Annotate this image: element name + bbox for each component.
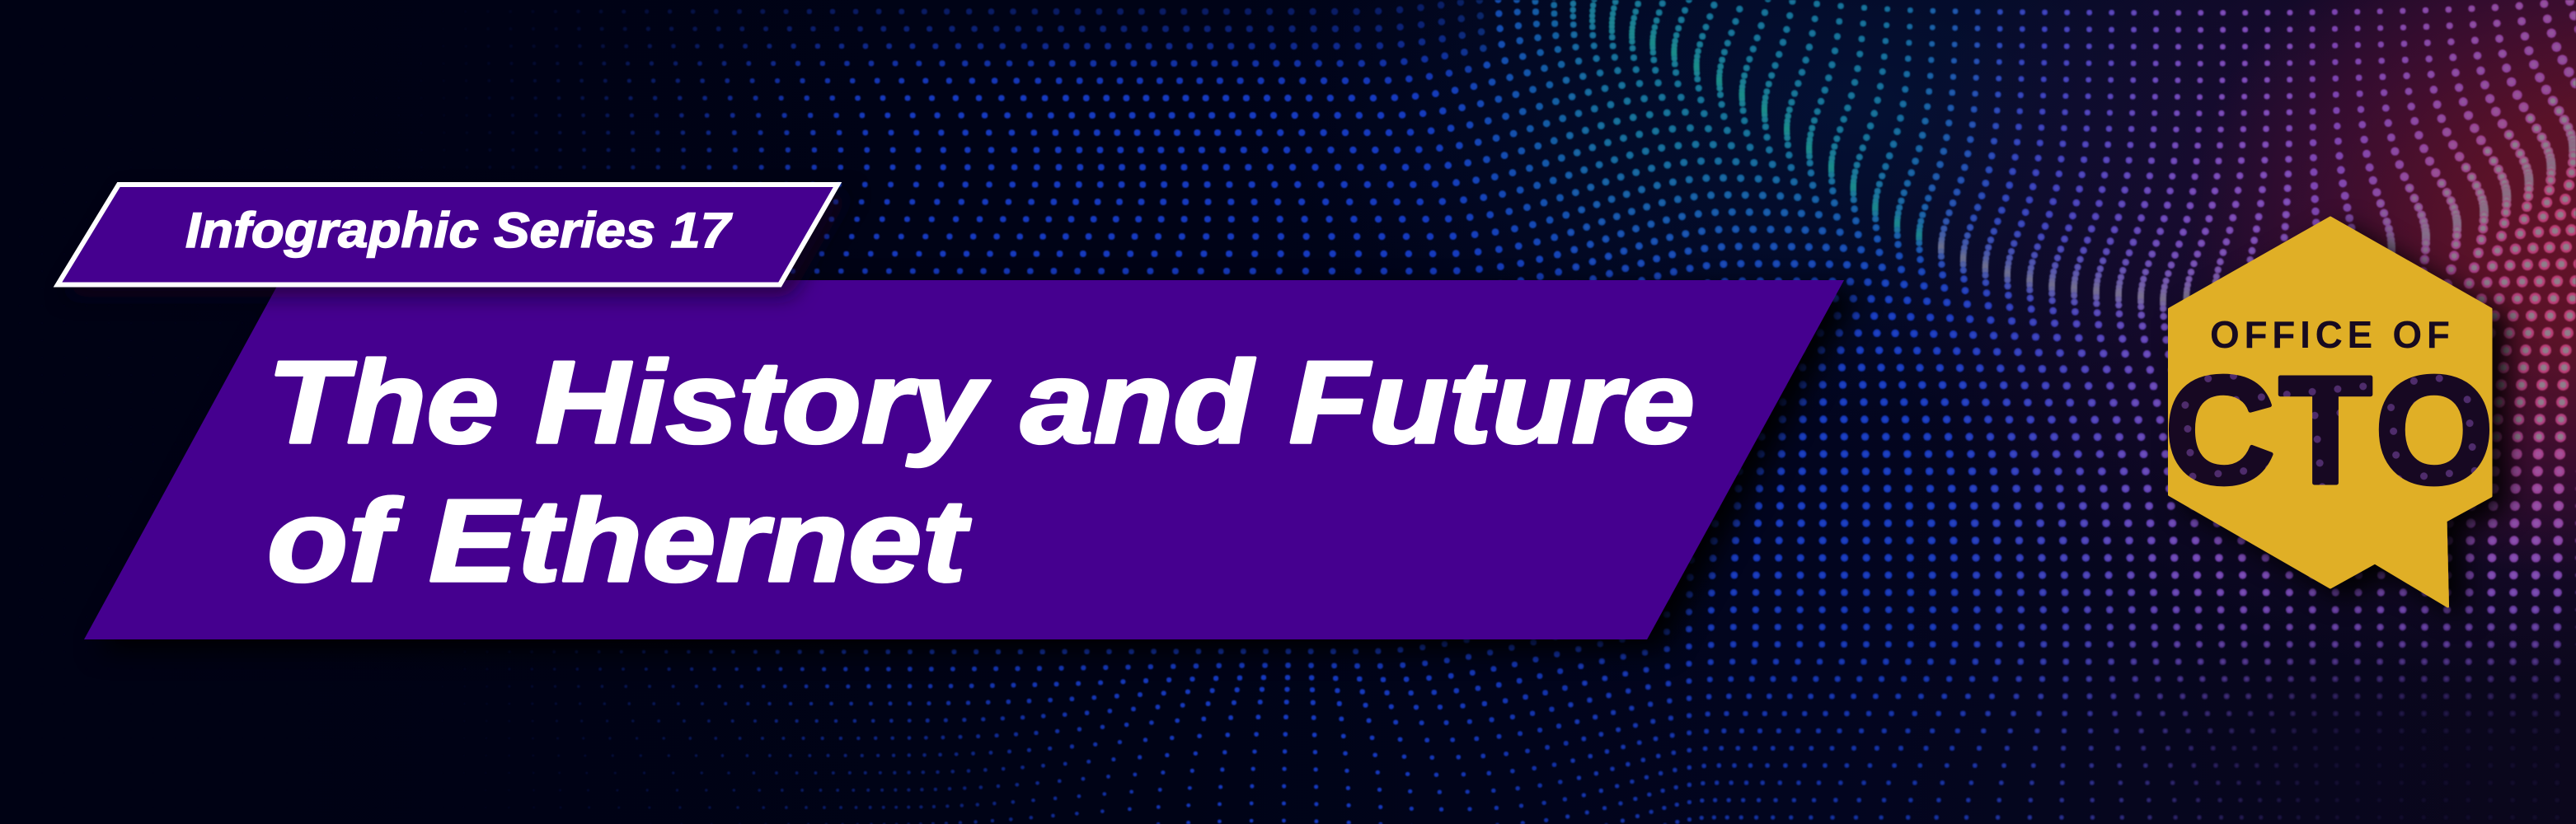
logo text: CTO: CTO (2165, 345, 2494, 516)
logo: Office of CTO (2165, 218, 2494, 606)
panel: main title (84, 280, 1844, 639)
series tag text: Infographic Series 17 (185, 203, 733, 258)
title: The History and Future (267, 337, 1695, 468)
panel: series tag (58, 185, 838, 285)
logo badge (2170, 218, 2491, 606)
logo text: office of: OFFICE OF (2210, 313, 2450, 356)
title (267, 337, 1695, 606)
title: of Ethernet (267, 475, 971, 606)
